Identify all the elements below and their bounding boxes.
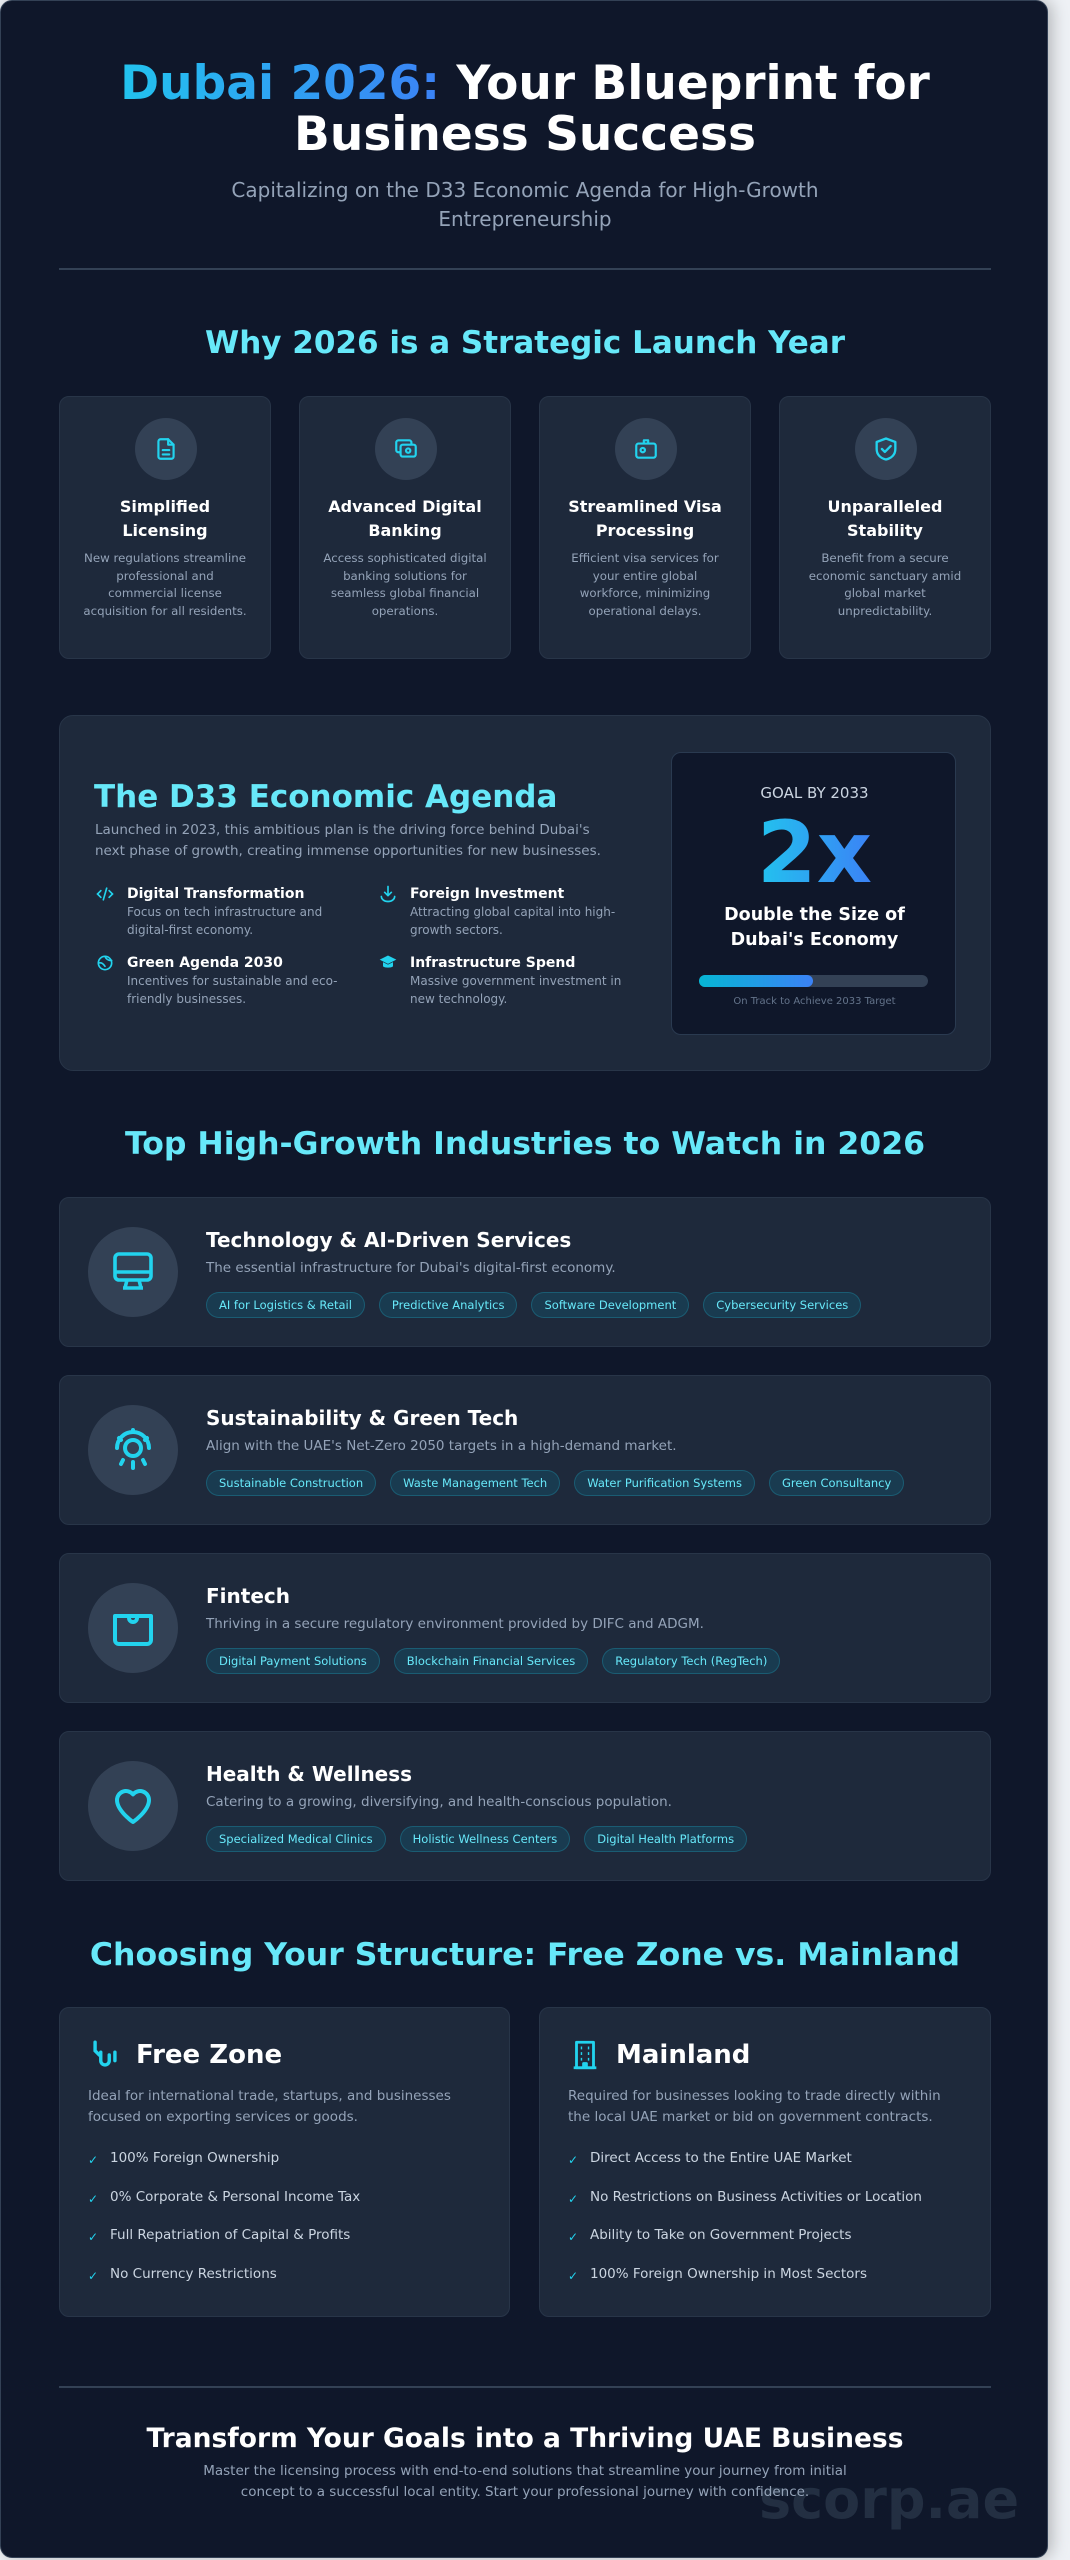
- panel: D33 agenda: Digital Transformation: [127, 886, 304, 902]
- callout: goal by 2033: GOAL BY 2033: [760, 784, 869, 802]
- panel: simplified licensing: [59, 396, 271, 659]
- panel: free zone: [59, 2007, 510, 2317]
- panel: sustainability: Waste Management Tech: [403, 1476, 547, 1490]
- panel: visa processing: Processing: [596, 521, 694, 540]
- icon: free zone: [93, 2040, 117, 2067]
- panel: health: Health & Wellness: [206, 1762, 412, 1786]
- icon: monitor: [88, 1227, 178, 1317]
- icon: cards: [375, 418, 437, 480]
- item: green agenda: [98, 955, 338, 1006]
- panel: fintech: Thriving in a secure regulatory environment provided by DIFC and ADGM.: [206, 1616, 704, 1632]
- panel: D33 agenda: Focus on tech infrastructure and digital-first economy.: [127, 905, 322, 936]
- panel: stability: Benefit from a secure economic sanctuary amid global market unpredictability.: [809, 551, 961, 618]
- panel: digital banking: Advanced Digital: [328, 497, 482, 516]
- callout: goal by 2033: On Track to Achieve 2033 Target: [733, 996, 896, 1007]
- panel: mainland: Ability to Take on Government Projects: [590, 2227, 852, 2243]
- panel: visa processing: Efficient visa services for your entire global workforce, minimizing operational delays.: [571, 551, 719, 618]
- panel: health: Catering to a growing, diversifying, and health-conscious population.: [206, 1794, 672, 1810]
- panel: simplified licensing: New regulations streamline professional and commercial license acquisition for all residents.: [83, 551, 247, 618]
- panel: free zone: Ideal for international trade, startups, and businesses focused on exporting services or goods.: [88, 2088, 451, 2125]
- progress bar: [699, 975, 928, 987]
- panel: simplified licensing: Simplified: [120, 497, 210, 516]
- panel: fintech: [59, 1553, 991, 1703]
- icon: building: [574, 2040, 596, 2070]
- panel: sustainability: Sustainable Construction: [219, 1476, 363, 1490]
- item: foreign investment: [380, 886, 615, 936]
- item: infrastructure: [380, 955, 621, 1006]
- panel: health: Holistic Wellness Centers: [413, 1832, 557, 1846]
- panel: visa processing: Streamlined Visa: [568, 497, 722, 516]
- panel: digital banking: Banking: [368, 521, 442, 540]
- callout: goal by 2033: Dubai's Economy: [731, 930, 898, 950]
- panel: mainland: [539, 2007, 991, 2317]
- panel: free zone: Free Zone: [136, 2040, 282, 2070]
- panel: fintech: Blockchain Financial Services: [407, 1654, 575, 1668]
- panel: mainland: Direct Access to the Entire UAE Market: [590, 2150, 852, 2166]
- icon: shield: [855, 418, 917, 480]
- panel: health: [59, 1731, 991, 1881]
- panel: mainland: Mainland: [616, 2040, 750, 2070]
- heading: D33: The D33 Economic Agenda: [94, 779, 557, 815]
- panel: technology: AI for Logistics & Retail: [219, 1298, 352, 1312]
- panel: technology: The essential infrastructure for Dubai's digital-first economy.: [206, 1260, 616, 1276]
- panel: fintech: Digital Payment Solutions: [219, 1654, 367, 1668]
- panel: sustainability: Sustainability & Green Tech: [206, 1406, 518, 1430]
- icon: wallet: [88, 1583, 178, 1673]
- footer heading: Transform Your Goals into a Thriving UAE Business: [147, 2423, 903, 2454]
- panel: technology: Technology & AI-Driven Services: [206, 1228, 571, 1252]
- title: Dubai 2026: Your Blueprint for: [120, 56, 930, 111]
- panel: fintech: Fintech: [206, 1584, 290, 1608]
- panel: sustainability: Align with the UAE's Net-Zero 2050 targets in a high-demand market.: [206, 1438, 677, 1454]
- panel: sustainability: Green Consultancy: [782, 1476, 891, 1490]
- panel: mainland: 100% Foreign Ownership in Most Sectors: [590, 2266, 867, 2282]
- watermark: scorp.ae: [759, 2468, 1019, 2531]
- panel: D33 agenda: Incentives for sustainable and eco-friendly businesses.: [127, 974, 338, 1006]
- panel: stability: [779, 396, 991, 659]
- panel: digital banking: [299, 396, 511, 659]
- panel: mainland: No Restrictions on Business Activities or Location: [590, 2188, 922, 2204]
- callout: goal by 2033: [671, 752, 956, 1035]
- panel: health: Digital Health Platforms: [597, 1832, 734, 1846]
- heading: industries: Top High-Growth Industries to Watch in 2026: [125, 1126, 925, 1162]
- panel: health: Specialized Medical Clinics: [219, 1832, 373, 1846]
- panel: technology: Cybersecurity Services: [716, 1298, 848, 1312]
- panel: free zone: Full Repatriation of Capital & Profits: [110, 2227, 350, 2243]
- icon: document: [135, 418, 197, 480]
- heading: structure: Choosing Your Structure: Free Zone vs. Mainland: [90, 1937, 960, 1973]
- panel: D33 agenda: [59, 715, 991, 1071]
- panel: mainland: Required for businesses looking to trade directly within the local UAE market or bid on government contracts.: [568, 2088, 941, 2125]
- panel: D33 agenda: Infrastructure Spend: [410, 955, 575, 971]
- panel: technology: Predictive Analytics: [392, 1298, 504, 1312]
- callout: goal by 2033: Double the Size of: [724, 905, 905, 925]
- panel: free zone: No Currency Restrictions: [110, 2266, 277, 2282]
- panel: free zone: 100% Foreign Ownership: [110, 2150, 279, 2166]
- icon: id badge: [615, 418, 677, 480]
- heading: why 2026: Why 2026 is a Strategic Launch Year: [205, 325, 845, 361]
- panel: stability: Stability: [847, 521, 923, 540]
- panel: D33 agenda: Foreign Investment: [410, 886, 564, 902]
- panel: technology: [59, 1197, 991, 1347]
- panel: sustainability: [59, 1375, 991, 1525]
- panel: stability: Unparalleled: [828, 497, 942, 516]
- panel: fintech: Regulatory Tech (RegTech): [615, 1654, 767, 1668]
- panel: simplified licensing: Licensing: [122, 521, 208, 540]
- panel: D33 agenda: Green Agenda 2030: [127, 955, 283, 971]
- icon: sun: [88, 1405, 178, 1495]
- panel: digital banking: Access sophisticated digital banking solutions for seamless global financial operations.: [323, 551, 487, 618]
- stat: 2x: 2x: [757, 803, 872, 903]
- title: Business Success: [294, 107, 756, 162]
- panel: sustainability: Water Purification Systems: [587, 1476, 742, 1490]
- panel: D33 agenda: Massive government investment in new technology.: [410, 974, 621, 1006]
- panel: free zone: 0% Corporate & Personal Income Tax: [110, 2188, 360, 2204]
- text: D33 description: Launched in 2023, this ambitious plan is the driving force behind Dubai's next phase of growth, creating immense opportunities for new businesses.: [95, 822, 601, 859]
- panel: technology: Software Development: [544, 1298, 676, 1312]
- panel: D33 agenda: Attracting global capital into high-growth sectors.: [410, 905, 615, 936]
- title: [120, 56, 930, 162]
- item: digital transformation: [96, 886, 322, 936]
- panel: visa processing: [539, 396, 751, 659]
- icon: heart: [88, 1761, 178, 1851]
- subtitle: Capitalizing on the D33 Economic Agenda for High-Growth Entrepreneurship: [231, 178, 819, 231]
- footer text: Master the licensing process with end-to-end solutions that streamline your journey from initial concept to a successful local entity. Start your professional journey with confidence.: [203, 2463, 847, 2500]
